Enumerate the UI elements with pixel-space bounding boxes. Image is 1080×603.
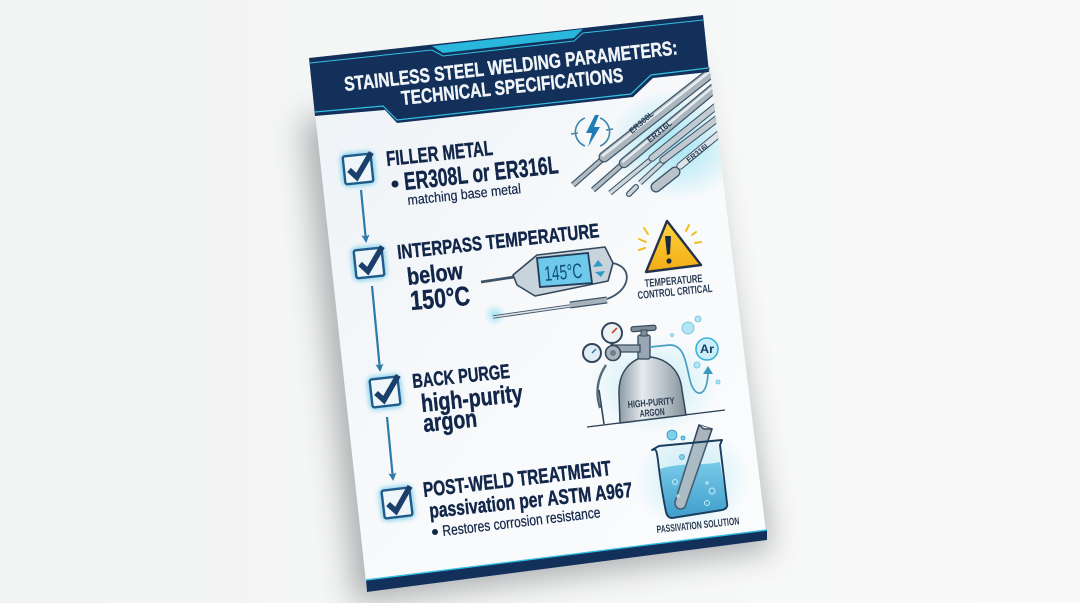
- interpass text: 150°C: [409, 281, 471, 316]
- Ar bubble: [696, 338, 718, 360]
- caption: temperature control critical: [637, 273, 713, 302]
- infographic scene: [288, 15, 783, 603]
- icon: lightning bolt: [571, 115, 613, 147]
- interpass text: [396, 220, 600, 316]
- poster: [309, 15, 767, 592]
- arrow 3: [387, 417, 393, 479]
- bubbles in water: [672, 480, 715, 506]
- section: back purge: [369, 361, 524, 438]
- water: [660, 462, 727, 517]
- illustration: argon cylinder: [583, 316, 725, 435]
- bottom bar: [366, 530, 767, 592]
- arrow 1: [361, 190, 366, 241]
- thermometer probe: [481, 277, 514, 282]
- caption: temperature control critical: TEMPERATURE: [644, 273, 703, 290]
- icon: warning triangle: [639, 221, 701, 272]
- back purge text: [411, 361, 524, 438]
- caption: temperature control critical: CONTROL CRITICAL: [637, 283, 713, 302]
- title: STAINLESS STEEL WELDING PARAMETERS:: [343, 37, 679, 96]
- filler metal text: ER308L or ER316L: [403, 151, 560, 196]
- illustration: passivation beaker: [634, 425, 750, 536]
- checkbox 1: [343, 153, 374, 184]
- rod 5 ER316L: ER316L: [685, 140, 712, 165]
- bubbles above beaker: [667, 430, 685, 460]
- back purge text: high-purity: [420, 379, 524, 418]
- test tube: [675, 425, 712, 509]
- interpass text: below: [406, 258, 465, 291]
- hose: [598, 365, 606, 408]
- beaker caption: PASSIVATION SOLUTION: [656, 515, 740, 536]
- gauges: [583, 323, 622, 362]
- rod 1 ER308L: [573, 70, 712, 185]
- post-weld text: [422, 457, 633, 540]
- checkbox 4: [381, 486, 414, 519]
- back purge text: BACK PURGE: [411, 361, 511, 393]
- rod 2 ER316L: ER316L: [646, 119, 674, 145]
- interpass text: INTERPASS TEMPERATURE: [396, 220, 600, 264]
- post-weld text: POST-WELD TREATMENT: [422, 457, 612, 502]
- arrow 2: [372, 286, 380, 370]
- filler metal text: matching base metal: [407, 180, 522, 208]
- gas bubbles: [670, 316, 720, 384]
- back purge text: argon: [422, 404, 478, 438]
- filler metal text: FILLER METAL: [385, 137, 494, 171]
- title: TECHNICAL SPECIFICATIONS: [400, 65, 624, 110]
- Ar bubble: Ar: [700, 342, 714, 356]
- cylinder label: HIGH-PURITY: [627, 396, 675, 411]
- section: interpass temperature: [354, 220, 600, 316]
- checkbox 2: [354, 247, 385, 278]
- rod 1 ER308L: ER308L: [627, 109, 656, 136]
- checkbox 3: [369, 375, 401, 407]
- filler metal text: [385, 137, 560, 208]
- rod 3: [610, 103, 720, 193]
- cylinder label: [627, 396, 675, 420]
- poster shadow: [303, 60, 772, 603]
- ground line: [587, 410, 725, 427]
- thermometer sensor: [493, 300, 607, 317]
- header banner: [309, 15, 709, 123]
- beaker outline: [652, 440, 727, 518]
- post-weld text: passivation per ASTM A967: [428, 479, 633, 523]
- title: [343, 37, 679, 110]
- thermometer body: [513, 247, 613, 296]
- thermometer display: 145°C: [543, 260, 583, 286]
- gas line: [650, 345, 708, 393]
- section: post-weld treatment: [381, 457, 633, 540]
- rod 5 ER316L: [656, 130, 724, 187]
- post-weld text: Restores corrosion resistance: [441, 504, 601, 540]
- rod 2 ER316L: [593, 84, 718, 190]
- rod 4: [629, 115, 722, 194]
- section: filler metal: [343, 137, 560, 208]
- illustration: thermometer: [481, 247, 627, 326]
- illustration: welding rods: [571, 67, 722, 197]
- cylinder label: ARGON: [639, 407, 665, 420]
- cylinder body: [619, 357, 686, 423]
- thermometer cable: [607, 263, 627, 299]
- valve: [613, 325, 656, 359]
